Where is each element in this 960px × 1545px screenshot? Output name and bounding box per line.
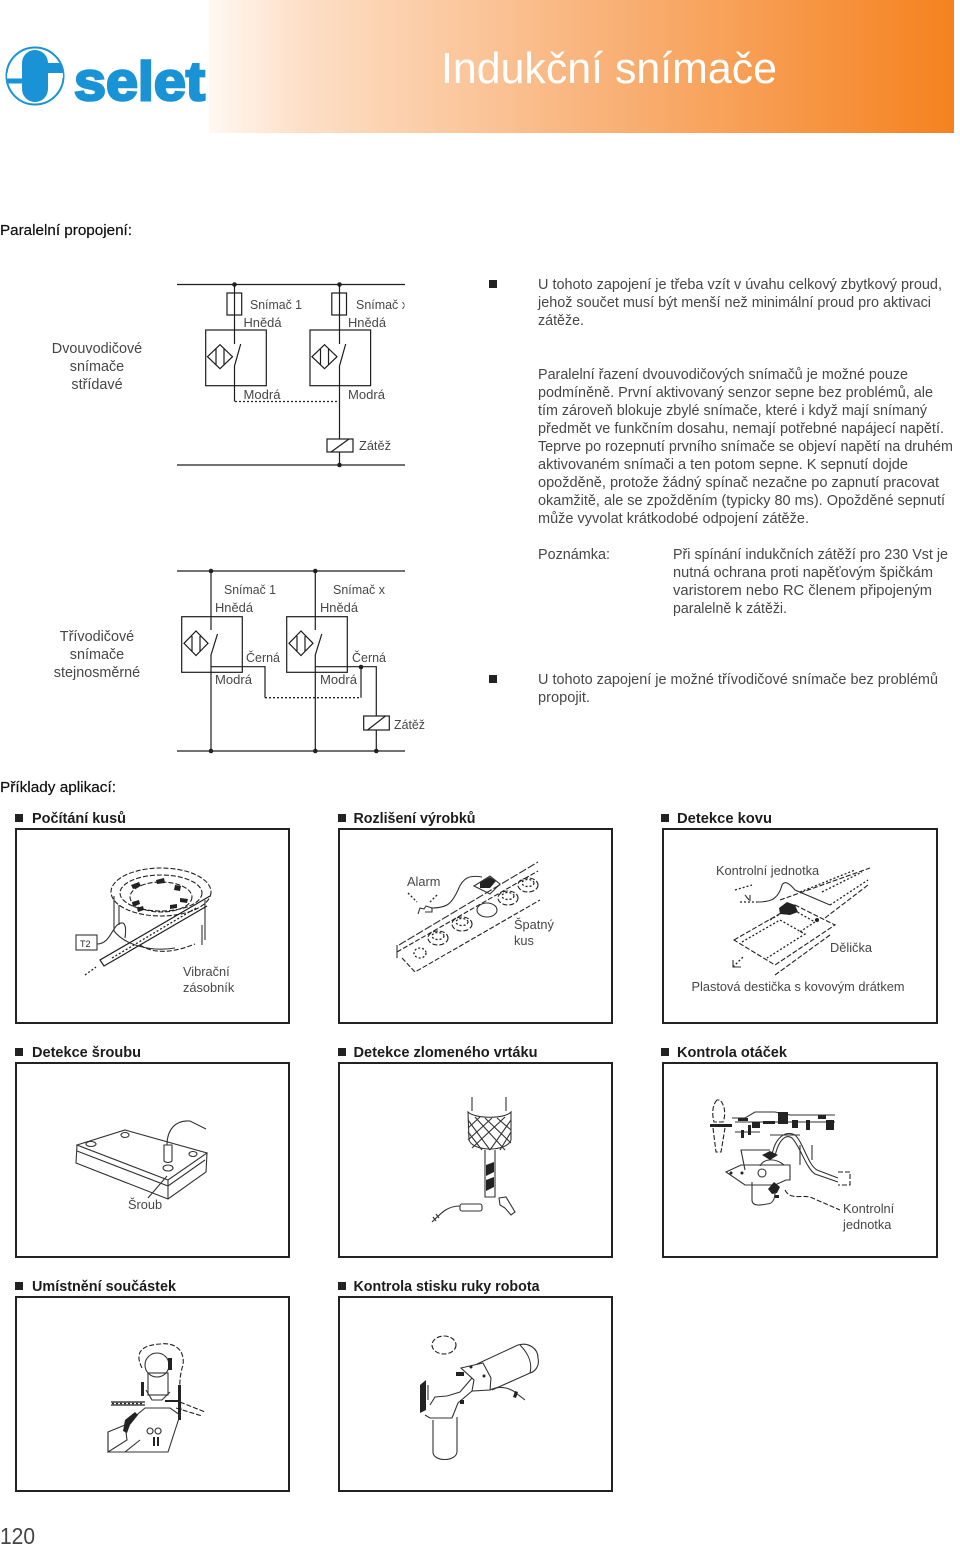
panel: screw detection	[15, 1044, 289, 1257]
text block: two-wire explanation: U tohoto zapojení je třeba vzít v úvahu celkový zbytkový proud,	[538, 277, 942, 293]
label: two-wire: Dvouvodičové	[52, 341, 142, 357]
label: bad piece	[514, 917, 554, 948]
logo: selet	[4, 48, 205, 112]
panel: metal detection	[661, 810, 937, 1023]
panel: broken drill: Detekce zlomeného vrtáku	[354, 1044, 538, 1061]
label: vibratory feeder	[183, 964, 235, 995]
panel: product distinction: Rozlišení výrobků	[354, 810, 476, 827]
label: bad piece: kus	[514, 933, 534, 948]
label: two-wire	[52, 341, 142, 393]
panel: speed control	[661, 1044, 937, 1257]
label: plastic board: Plastová destička s kovovým drátkem	[692, 979, 904, 994]
note: Poznámka:	[538, 547, 610, 563]
diagram: two-wire parallel	[177, 282, 408, 467]
diagram: two-wire parallel: Modrá	[244, 387, 281, 402]
text block: two-wire explanation: Paralelní řazení dvouvodičových snímačů je možné pouze	[538, 367, 908, 383]
label: screw: Šroub	[128, 1197, 162, 1212]
header band	[209, 0, 954, 133]
text block: two-wire explanation: opožděně, protože žádný spínač nezačne po zapnutí pracovat	[538, 475, 939, 491]
text block: three-wire explanation: propojit.	[538, 690, 590, 706]
diagram: three-wire parallel: Modrá	[215, 672, 253, 687]
text block: two-wire explanation: Teprve po rozepnutí prvního snímače se objeví napětí na druhém	[538, 439, 953, 455]
diagram: three-wire parallel	[177, 569, 425, 753]
note	[538, 547, 948, 617]
panel: part placement: Umístnění součástek	[32, 1278, 177, 1295]
diagram: two-wire parallel: Hnědá	[244, 315, 282, 330]
label: control unit: jednotka	[842, 1217, 892, 1232]
label: divider: Dělička	[830, 940, 873, 955]
illustration: vibratory bowl	[76, 868, 211, 975]
label: control unit: Kontrolní	[843, 1201, 895, 1216]
text block: two-wire explanation: může vyvolat krátkodobé odpojení zátěže.	[538, 511, 809, 527]
text block: two-wire explanation: tím zároveň blokuje zbylé snímače, které i když mají snímaný	[538, 403, 928, 419]
text block: two-wire explanation: podmíněně. První aktivovaný senzor sepne bez problémů, ale	[538, 385, 933, 401]
illustration: plastic board inspection	[733, 868, 870, 975]
diagram: three-wire parallel: Hnědá	[320, 600, 359, 615]
panel: counting pieces	[15, 810, 289, 1023]
panel: robot grip	[338, 1278, 612, 1491]
diagram: three-wire parallel: Snímač x	[333, 582, 385, 597]
panel: product distinction	[338, 810, 612, 1023]
panel: broken drill	[338, 1044, 612, 1257]
illustration: robot gripper	[420, 1336, 538, 1460]
note: paralelně k zátěži.	[673, 601, 787, 617]
title: Indukční snímače	[441, 44, 777, 93]
diagram: two-wire parallel: Hnědá	[348, 315, 387, 330]
illustration: block with sensor	[76, 1121, 207, 1199]
panel: metal detection: Detekce kovu	[677, 810, 772, 827]
label: control unit	[842, 1201, 895, 1232]
diagram: three-wire parallel: Modrá	[320, 672, 358, 687]
note: nutná ochrana proti napěťovým špičkám	[673, 565, 933, 581]
note: varistorem nebo RC členem připojeným	[673, 583, 932, 599]
label: bad piece: Špatný	[514, 917, 554, 932]
text block: two-wire explanation: aktivovaném snímači a ten potom sepne. K sepnutí dojde	[538, 457, 908, 473]
illustration: machine mechanism	[710, 1100, 850, 1210]
panel: counting pieces: Počítání kusů	[32, 810, 126, 827]
text block: three-wire explanation	[489, 672, 938, 706]
note: Při spínání indukčních zátěží pro 230 Vst je	[673, 547, 948, 563]
label: two-wire: střídavé	[71, 377, 123, 393]
panel: robot grip: Kontrola stisku ruky robota	[354, 1278, 540, 1295]
label: two-wire: snímače	[70, 359, 124, 375]
diagram: two-wire parallel: Zátěž	[359, 438, 391, 453]
diagram: three-wire parallel: Černá	[352, 650, 387, 665]
label: three-wire: stejnosměrné	[54, 665, 140, 681]
diagram: three-wire parallel: Hnědá	[215, 600, 254, 615]
heading: application examples: Příklady aplikací:	[0, 780, 116, 796]
illustration: vibratory bowl: T2	[80, 939, 91, 949]
heading: parallel connection: Paralelní propojení:	[0, 223, 132, 239]
logo: selet: selet	[74, 50, 205, 112]
label: alarm: Alarm	[407, 874, 440, 889]
illustration: drill and sensor	[432, 1097, 515, 1222]
diagram: three-wire parallel: Snímač 1	[224, 582, 276, 597]
illustration: placement machine	[108, 1344, 205, 1452]
text block: three-wire explanation: U tohoto zapojení je možné třívodičové snímače bez problémů	[538, 672, 938, 688]
text block: two-wire explanation	[489, 277, 953, 527]
label: three-wire: Třívodičové	[60, 629, 134, 645]
label: control unit: Kontrolní jednotka	[716, 863, 820, 878]
diagram: two-wire parallel: Modrá	[348, 387, 386, 402]
panel: speed control: Kontrola otáček	[677, 1044, 788, 1061]
text block: two-wire explanation: okamžitě, ale se zpožděním (typicky 80 ms). Opožděné sepnutí	[538, 493, 945, 509]
diagram: two-wire parallel: Snímač 1	[250, 297, 302, 312]
panel: part placement	[15, 1278, 289, 1491]
label: vibratory feeder: Vibrační	[183, 964, 230, 979]
label: three-wire	[54, 629, 140, 681]
text block: two-wire explanation: jehož součet musí být menší než minimální proud pro aktivaci	[537, 295, 931, 311]
label: vibratory feeder: zásobník	[183, 980, 235, 995]
diagram: two-wire parallel: Snímač x	[356, 297, 408, 312]
diagram: three-wire parallel: Zátěž	[394, 717, 425, 732]
illustration: conveyor with discs	[397, 862, 540, 972]
bullet	[489, 675, 497, 683]
text block: two-wire explanation: předmět ve funkčním dosahu, nemají potřebné napájecí napětí.	[538, 421, 944, 437]
label: three-wire: snímače	[70, 647, 124, 663]
diagram: three-wire parallel: Černá	[246, 650, 281, 665]
text block: two-wire explanation: zátěže.	[538, 313, 584, 329]
panel: screw detection: Detekce šroubu	[32, 1044, 141, 1061]
bullet	[489, 280, 497, 288]
